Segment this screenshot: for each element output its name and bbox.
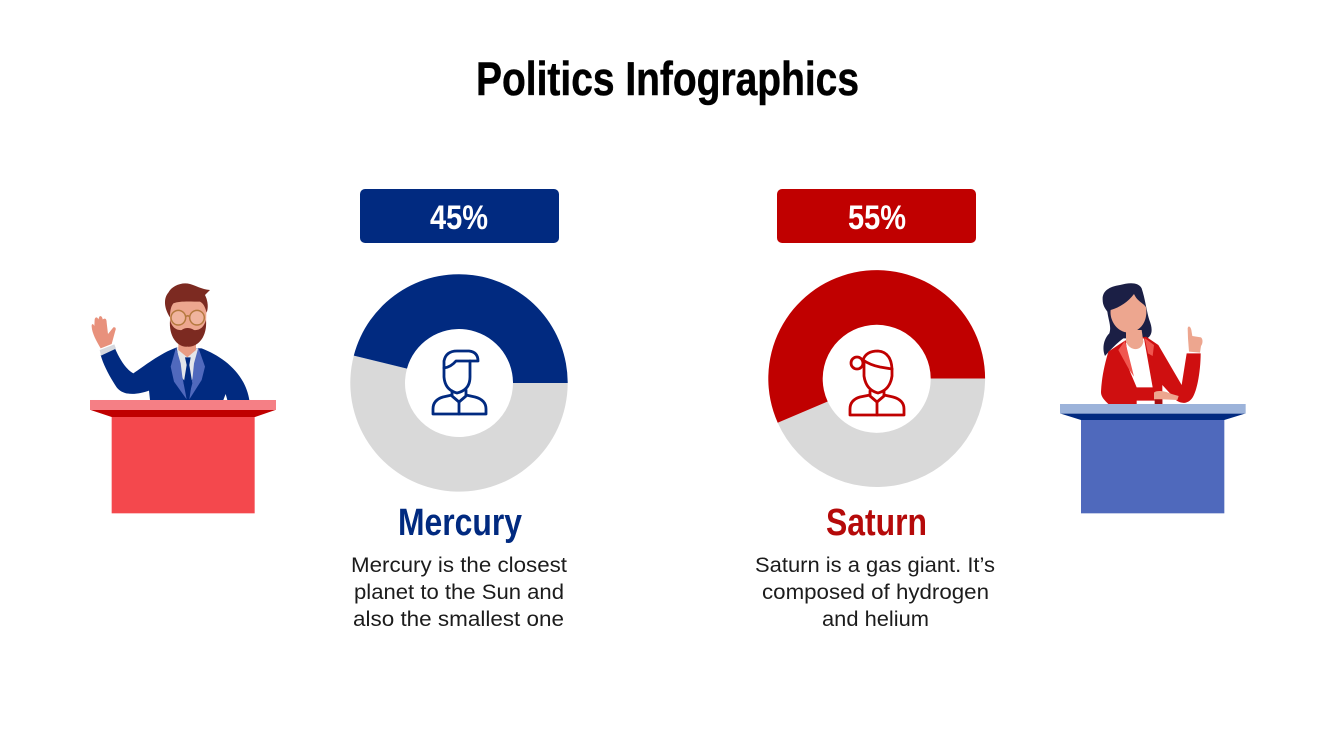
illustration: woman at blue podium	[1060, 283, 1246, 513]
illustration: man at red podium	[90, 283, 276, 513]
text block: Saturn description: Saturn is a gas giant. It’s	[755, 553, 995, 577]
text block: Mercury description	[351, 553, 567, 631]
jacket	[101, 347, 249, 400]
face	[170, 298, 207, 342]
collars	[1118, 341, 1134, 377]
podium top	[1060, 404, 1246, 414]
heading: Mercury: Mercury	[398, 502, 522, 544]
lapels	[171, 348, 187, 399]
jacket	[1101, 337, 1201, 404]
text block: Mercury description: planet to the Sun and	[354, 580, 564, 604]
white gap under arm	[1137, 401, 1155, 404]
hand	[92, 316, 116, 348]
neck	[1126, 330, 1143, 349]
podium body	[1081, 420, 1224, 513]
donut chart: Saturn 55%	[768, 270, 985, 487]
hair	[165, 283, 210, 317]
text block: Saturn description: composed of hydrogen	[762, 580, 989, 604]
panel: Mercury percentage badge: 45%	[430, 199, 488, 237]
panel: Saturn percentage badge	[777, 189, 976, 243]
title: Politics Infographics	[476, 52, 859, 105]
raised hand	[1188, 327, 1203, 353]
tie	[184, 357, 192, 399]
panel: Mercury percentage badge	[360, 189, 559, 243]
glasses	[171, 310, 204, 325]
back hair	[1103, 283, 1152, 356]
cuff	[100, 344, 116, 356]
neck and shirt	[177, 347, 198, 385]
face	[1111, 294, 1146, 333]
lower hand	[1154, 391, 1179, 400]
text block: Mercury description: Mercury is the closest	[351, 553, 567, 577]
podium body	[112, 417, 255, 513]
podium underside	[1061, 414, 1245, 420]
beard	[170, 320, 206, 347]
text block: Saturn description	[755, 553, 995, 631]
blouse	[1126, 338, 1153, 387]
text block: Mercury description: also the smallest one	[353, 607, 564, 631]
panel: Saturn percentage badge: 55%	[848, 199, 906, 237]
podium underside	[91, 410, 275, 417]
cuff	[1155, 399, 1162, 404]
podium top	[90, 400, 276, 410]
icon: man outline	[433, 351, 486, 414]
icon: woman outline	[850, 351, 904, 415]
text block: Saturn description: and helium	[822, 607, 929, 631]
donut chart: Mercury 45%	[350, 274, 568, 492]
heading: Saturn: Saturn	[826, 502, 927, 544]
